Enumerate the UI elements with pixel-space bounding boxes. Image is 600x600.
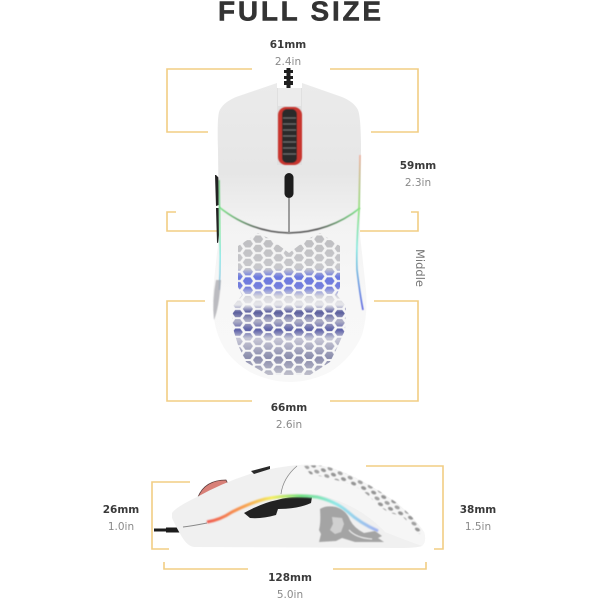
label: bottom width: 66mm	[271, 402, 307, 414]
icon: cable	[284, 68, 293, 88]
left side shadow	[213, 280, 221, 320]
label: height rear: 38mm	[460, 504, 496, 516]
mouse: side view	[154, 465, 425, 548]
top button	[251, 466, 270, 474]
icon: scroll wheel	[198, 480, 228, 500]
label: height rear	[460, 504, 496, 533]
label: length	[400, 160, 436, 189]
label: height rear: 1.5in	[465, 521, 491, 533]
label: top width	[270, 39, 306, 68]
label: length: 2.3in	[405, 177, 431, 189]
mouse body	[172, 465, 425, 548]
label: top width: 2.4in	[275, 56, 301, 68]
label: length: 59mm	[400, 160, 436, 172]
icon: cable	[154, 528, 180, 532]
label: side length: 128mm	[268, 572, 312, 584]
rgb arc	[219, 207, 360, 233]
label: height front: 1.0in	[108, 521, 134, 533]
brackets: top view	[167, 69, 418, 401]
mouse body	[213, 83, 366, 382]
label: height front: 26mm	[103, 504, 139, 516]
shell seam	[281, 466, 297, 494]
brackets: side view	[152, 466, 443, 569]
side buttons	[244, 496, 312, 518]
label: side length	[268, 572, 312, 600]
icon: logo	[319, 506, 384, 542]
label: top width: 61mm	[270, 39, 306, 51]
label: bottom width: 2.6in	[276, 419, 302, 431]
side buttons	[215, 175, 220, 243]
honeycomb	[232, 233, 346, 375]
rgb strip	[207, 496, 378, 531]
seam line	[183, 523, 207, 527]
honeycomb	[304, 465, 424, 534]
rgb right strip	[357, 155, 363, 310]
centre channel	[277, 88, 302, 165]
label: bottom width	[271, 402, 307, 431]
icon: scroll wheel	[278, 107, 302, 165]
label: middle: Middle	[413, 249, 427, 287]
rgb left strip	[219, 180, 220, 290]
mouse: top view	[213, 68, 366, 382]
label: height front	[103, 504, 139, 533]
channel highlight	[278, 88, 301, 106]
button divider	[288, 198, 290, 232]
icon: dpi button	[284, 173, 294, 198]
top shell	[281, 465, 425, 546]
